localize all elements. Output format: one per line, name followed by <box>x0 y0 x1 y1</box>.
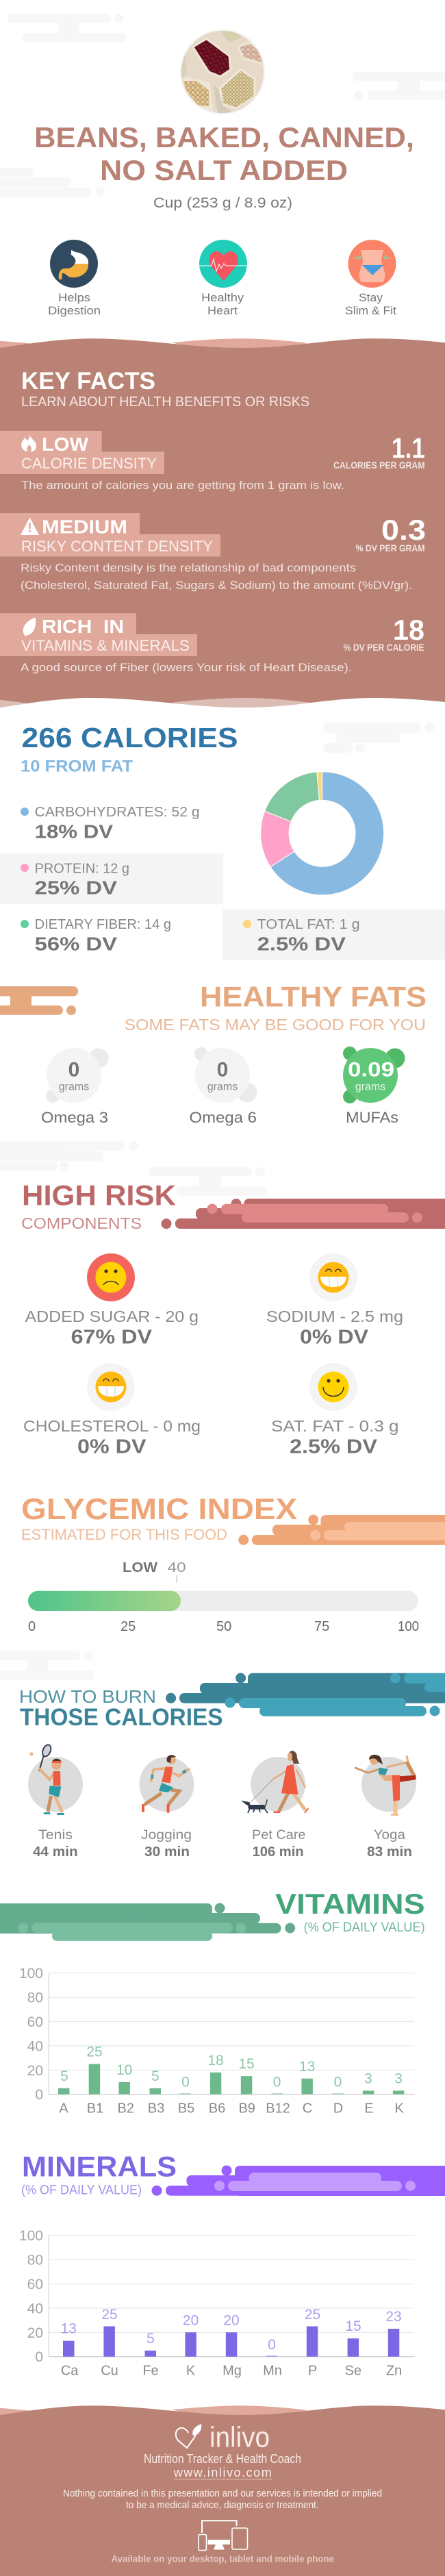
bar chart: minerals: 40 <box>27 2301 43 2316</box>
icon: devices <box>199 2521 248 2551</box>
gauge scale: 25 <box>120 1619 136 1634</box>
marker: low 40: LOW <box>123 1560 157 1575</box>
legend: carbohydrates: 18% DV <box>35 821 113 842</box>
activity: jogging: 30 min <box>144 1845 190 1860</box>
legend: dietary fiber: 56% DV <box>35 933 117 954</box>
subheading: (% OF DAILY VALUE) <box>21 2183 142 2197</box>
disclaimer <box>63 2488 382 2511</box>
heading: MINERALS <box>22 2151 177 2183</box>
wave behind footer top <box>0 2405 308 2416</box>
omega 6: Omega 6 <box>189 1109 257 1126</box>
benefit: stay slim and fit: Slim & Fit <box>345 304 396 317</box>
sodium: grin face: SODIUM - 2.5 mg <box>266 1308 403 1325</box>
bar chart: vitamins: B1 <box>87 2101 103 2116</box>
fact: rich in vitamins and minerals <box>0 613 424 674</box>
bar chart: minerals: 25 <box>305 2307 320 2323</box>
fact: medium risky content density <box>0 513 426 592</box>
activity: tennis: Tenis <box>38 1828 73 1842</box>
saturated fat: smile face <box>271 1363 398 1458</box>
bar chart: vitamins: 15 <box>238 2056 255 2072</box>
bar chart: vitamins: D <box>333 2101 343 2116</box>
mufas: MUFAs <box>346 1109 398 1126</box>
bar chart: minerals: 20 <box>223 2312 240 2328</box>
bar chart: vitamins: 100 <box>19 1966 43 1981</box>
background clouds <box>0 14 445 197</box>
fact: medium risky content density: MEDIUM <box>42 516 127 538</box>
legend: protein <box>0 853 223 904</box>
disclaimer: Nothing contained in this presentation and our services is intended or implied <box>63 2488 382 2499</box>
bar chart: vitamins: 18 <box>207 2053 224 2068</box>
bar chart: vitamins <box>19 1966 414 2116</box>
bar chart: vitamins: 0 <box>35 2087 43 2103</box>
added sugar: sad face <box>25 1253 199 1349</box>
fact: rich in vitamins and minerals: % DV PER CALORIE <box>344 642 424 653</box>
bar chart: vitamins: B9 <box>238 2101 255 2116</box>
bar chart: minerals: P <box>308 2363 317 2378</box>
fact: rich in vitamins and minerals: 18 <box>393 614 424 646</box>
heading <box>19 1686 223 1731</box>
bar chart: minerals: Mg <box>222 2363 242 2378</box>
title <box>34 121 414 186</box>
mufas <box>343 1047 405 1126</box>
activity: pet care <box>241 1751 309 1860</box>
bar chart: vitamins: 5 <box>60 2068 68 2084</box>
gauge scale: 50 <box>216 1619 231 1634</box>
bar chart: vitamins: B2 <box>117 2101 134 2116</box>
omega 3: 0 <box>68 1059 79 1081</box>
bar chart: vitamins: B3 <box>148 2101 164 2116</box>
fact: rich in vitamins and minerals: A good source of Fiber (lowers Your risk of Heart Disease). <box>21 661 352 674</box>
added sugar: sad face: 67% DV <box>71 1327 153 1349</box>
heading: 266 CALORIES <box>22 722 238 753</box>
fact: medium risky content density: RISKY CONTENT DENSITY <box>21 538 213 555</box>
marker: low 40 <box>123 1560 186 1583</box>
activity: jogging <box>139 1755 194 1860</box>
fact: rich in vitamins and minerals: RICH IN <box>42 616 124 637</box>
bar chart: minerals: 23 <box>385 2309 402 2325</box>
panel: how to burn calories <box>0 1651 445 1860</box>
panel: minerals <box>19 2151 445 2378</box>
omega 6 <box>189 1047 257 1126</box>
panel: calories <box>0 722 445 960</box>
cholesterol: grin face <box>23 1363 201 1458</box>
bar chart: minerals: 25 <box>101 2307 118 2323</box>
activity: pet care: Pet Care <box>252 1828 305 1842</box>
food photo: bean sacks <box>178 27 267 116</box>
legend: total fat: TOTAL FAT: 1 g <box>257 917 360 932</box>
gauge scale: 75 <box>314 1619 329 1634</box>
benefit: helps digestion <box>48 240 101 317</box>
bar chart: minerals: Cu <box>101 2363 118 2378</box>
gauge bar <box>28 1591 418 1611</box>
fact: low calorie density: The amount of calories you are getting from 1 gram is low. <box>21 479 344 492</box>
bar chart: minerals: 15 <box>345 2318 361 2334</box>
mufas: 0.09 <box>348 1059 394 1081</box>
gauge scale: 0 <box>28 1619 36 1634</box>
heading: HIGH RISK <box>22 1179 176 1211</box>
donut chart <box>261 772 384 895</box>
omega 3 <box>41 1048 108 1126</box>
background cloud <box>323 723 434 753</box>
background clouds <box>0 1141 267 1196</box>
fact: medium risky content density: 0.3 <box>381 514 426 546</box>
decorative band <box>0 1903 295 1941</box>
title: NO SALT ADDED <box>100 154 348 186</box>
benefit: stay slim and fit <box>345 240 396 317</box>
bar chart: vitamins: 3 <box>364 2071 372 2087</box>
activity: yoga: 83 min <box>367 1845 412 1860</box>
serving size: Cup (253 g / 8.9 oz) <box>153 195 292 211</box>
bar chart: vitamins: 5 <box>151 2068 160 2084</box>
heading: VITAMINS <box>275 1888 425 1920</box>
wave behind band top <box>0 338 308 349</box>
cholesterol: grin face: 0% DV <box>77 1436 147 1458</box>
heading: GLYCEMIC INDEX <box>21 1492 297 1526</box>
bar chart: vitamins: 0 <box>181 2075 190 2090</box>
bar chart: minerals: 0 <box>35 2349 43 2365</box>
activity: yoga <box>355 1755 416 1860</box>
bar chart: minerals: Ca <box>61 2363 79 2378</box>
fact: low calorie density: CALORIES PER GRAM <box>333 460 425 471</box>
activity: pet care: 106 min <box>253 1845 304 1860</box>
decorative band <box>162 1199 445 1229</box>
benefit: helps digestion: Helps <box>58 291 90 304</box>
fact: low calorie density <box>0 431 425 492</box>
icon: warning triangle <box>21 518 39 535</box>
panel: healthy fats <box>0 980 427 1126</box>
bar chart: minerals: 20 <box>27 2325 43 2341</box>
wave accents at band bottom <box>0 698 310 708</box>
bar chart: vitamins: E <box>364 2101 374 2116</box>
benefit: stay slim and fit: Stay <box>359 291 383 304</box>
bar chart: vitamins: 0 <box>334 2075 342 2090</box>
benefit: healthy heart <box>199 240 247 317</box>
decorative band <box>166 1673 445 1716</box>
bar chart: minerals: Mn <box>263 2363 282 2378</box>
legend: carbohydrates <box>21 805 200 842</box>
subheading: ESTIMATED FOR THIS FOOD <box>21 1526 227 1543</box>
panel: vitamins <box>0 1888 425 2116</box>
legend: dietary fiber: DIETARY FIBER: 14 g <box>35 917 171 932</box>
bar chart: vitamins: 25 <box>86 2044 103 2060</box>
inlivo logo: inlivo <box>209 2421 270 2453</box>
bar chart: minerals <box>19 2228 414 2378</box>
bar chart: minerals: Zn <box>386 2363 402 2378</box>
gauge scale: 100 <box>398 1619 419 1634</box>
bar chart: vitamins: 13 <box>299 2059 315 2075</box>
bar chart: vitamins: 3 <box>394 2071 403 2087</box>
mufas: grams <box>355 1081 385 1093</box>
bar chart: minerals: Se <box>345 2363 361 2378</box>
bar chart: vitamins: C <box>303 2101 312 2116</box>
legend: protein: PROTEIN: 12 g <box>35 861 129 876</box>
decorative band <box>238 1515 445 1545</box>
availability note: Available on your desktop, tablet and mobile phone <box>111 2553 334 2564</box>
bar chart: vitamins: B5 <box>178 2101 194 2116</box>
fact: low calorie density: LOW <box>42 434 89 455</box>
saturated fat: smile face: 2.5% DV <box>290 1436 378 1458</box>
heading: KEY FACTS <box>21 368 155 395</box>
subheading: LEARN ABOUT HEALTH BENEFITS OR RISKS <box>21 395 309 410</box>
footer background <box>0 2405 445 2576</box>
tagline: Nutrition Tracker & Health Coach <box>144 2452 301 2466</box>
bar chart: minerals: Fe <box>142 2363 159 2378</box>
header section <box>36 29 412 316</box>
heading: THOSE CALORIES <box>20 1704 223 1731</box>
bar chart: minerals: 0 <box>268 2337 276 2353</box>
saturated fat: smile face: SAT. FAT - 0.3 g <box>271 1417 398 1435</box>
omega 6: grams <box>207 1081 238 1093</box>
subheading: (% OF DAILY VALUE) <box>304 1921 425 1935</box>
bar chart: vitamins: B6 <box>209 2101 225 2116</box>
subheading: COMPONENTS <box>21 1214 142 1232</box>
bar chart: minerals: 20 <box>183 2312 199 2328</box>
sodium: grin face: 0% DV <box>300 1327 369 1349</box>
disclaimer: to be a medical advice, diagnosis or treatment. <box>126 2500 319 2511</box>
subheading: 10 FROM FAT <box>21 758 133 776</box>
bar chart: vitamins: 60 <box>27 2014 43 2030</box>
legend: total fat: 2.5% DV <box>257 933 346 954</box>
fact: medium risky content density: Risky Content density is the relationship of bad components <box>21 562 356 575</box>
inlivo logo <box>176 2421 270 2453</box>
bar chart: vitamins: K <box>394 2101 404 2116</box>
legend: protein: 25% DV <box>35 877 117 898</box>
benefit: helps digestion: Digestion <box>48 304 101 317</box>
omega 6: 0 <box>217 1059 228 1081</box>
omega 3: grams <box>59 1081 89 1093</box>
fact: low calorie density: CALORIE DENSITY <box>21 455 157 472</box>
heading: HOW TO BURN <box>19 1686 156 1707</box>
fact: rich in vitamins and minerals: VITAMINS & MINERALS <box>21 637 190 654</box>
icon: leaf <box>23 618 36 637</box>
heading: HEALTHY FATS <box>200 980 427 1012</box>
bar chart: vitamins: A <box>59 2101 68 2116</box>
activity: jogging: Jogging <box>141 1828 192 1842</box>
fact: medium risky content density: % DV PER GRAM <box>356 542 424 553</box>
omega 3: Omega 3 <box>41 1109 108 1126</box>
panel: key facts <box>0 338 445 708</box>
benefit: healthy heart: Healthy <box>201 291 244 304</box>
legend: total fat <box>222 910 445 960</box>
bar chart: vitamins: 80 <box>27 1990 43 2005</box>
bar chart: minerals: 100 <box>19 2228 43 2244</box>
bar chart: minerals: K <box>186 2363 196 2378</box>
panel: high risk components <box>0 1141 445 1458</box>
added sugar: sad face: ADDED SUGAR - 20 g <box>25 1308 199 1325</box>
band background <box>0 338 445 708</box>
cholesterol: grin face: CHOLESTEROL - 0 mg <box>23 1417 201 1435</box>
activity: yoga: Yoga <box>374 1828 405 1842</box>
website: www.inlivo.com <box>173 2466 272 2479</box>
panel: glycemic index <box>21 1492 445 1634</box>
title: BEANS, BAKED, CANNED, <box>34 121 414 153</box>
decorative band <box>152 2166 445 2196</box>
bar chart: minerals: 13 <box>61 2321 77 2337</box>
fact: medium risky content density: (Cholesterol, Saturated Fat, Sugars & Sodium) to the amount (%DV/gr). <box>21 579 412 592</box>
bar chart: vitamins: 0 <box>273 2075 281 2090</box>
background cloud <box>0 1651 94 1680</box>
panel: footer <box>0 2405 445 2576</box>
bar chart: minerals: 60 <box>27 2277 43 2292</box>
benefit: healthy heart: Heart <box>207 304 238 317</box>
legend: carbohydrates: CARBOHYDRATES: 52 g <box>35 805 200 820</box>
bar chart: vitamins: 20 <box>27 2063 43 2079</box>
legend: dietary fiber <box>21 917 171 954</box>
decorative band <box>0 986 78 1015</box>
sodium: grin face <box>266 1253 403 1349</box>
bar chart: vitamins: 40 <box>27 2038 43 2055</box>
marker: low 40: 40 <box>168 1560 186 1575</box>
activity: tennis <box>28 1742 83 1860</box>
activity: tennis: 44 min <box>33 1845 78 1860</box>
subheading: SOME FATS MAY BE GOOD FOR YOU <box>125 1016 426 1034</box>
bar chart: vitamins: 10 <box>116 2062 132 2078</box>
bar chart: minerals: 5 <box>147 2331 155 2347</box>
bar chart: minerals: 80 <box>27 2252 43 2268</box>
gauge scale <box>28 1619 419 1634</box>
bar chart: vitamins: B12 <box>266 2101 290 2116</box>
icon: flame <box>21 434 36 452</box>
fact: low calorie density: 1.1 <box>392 432 425 464</box>
